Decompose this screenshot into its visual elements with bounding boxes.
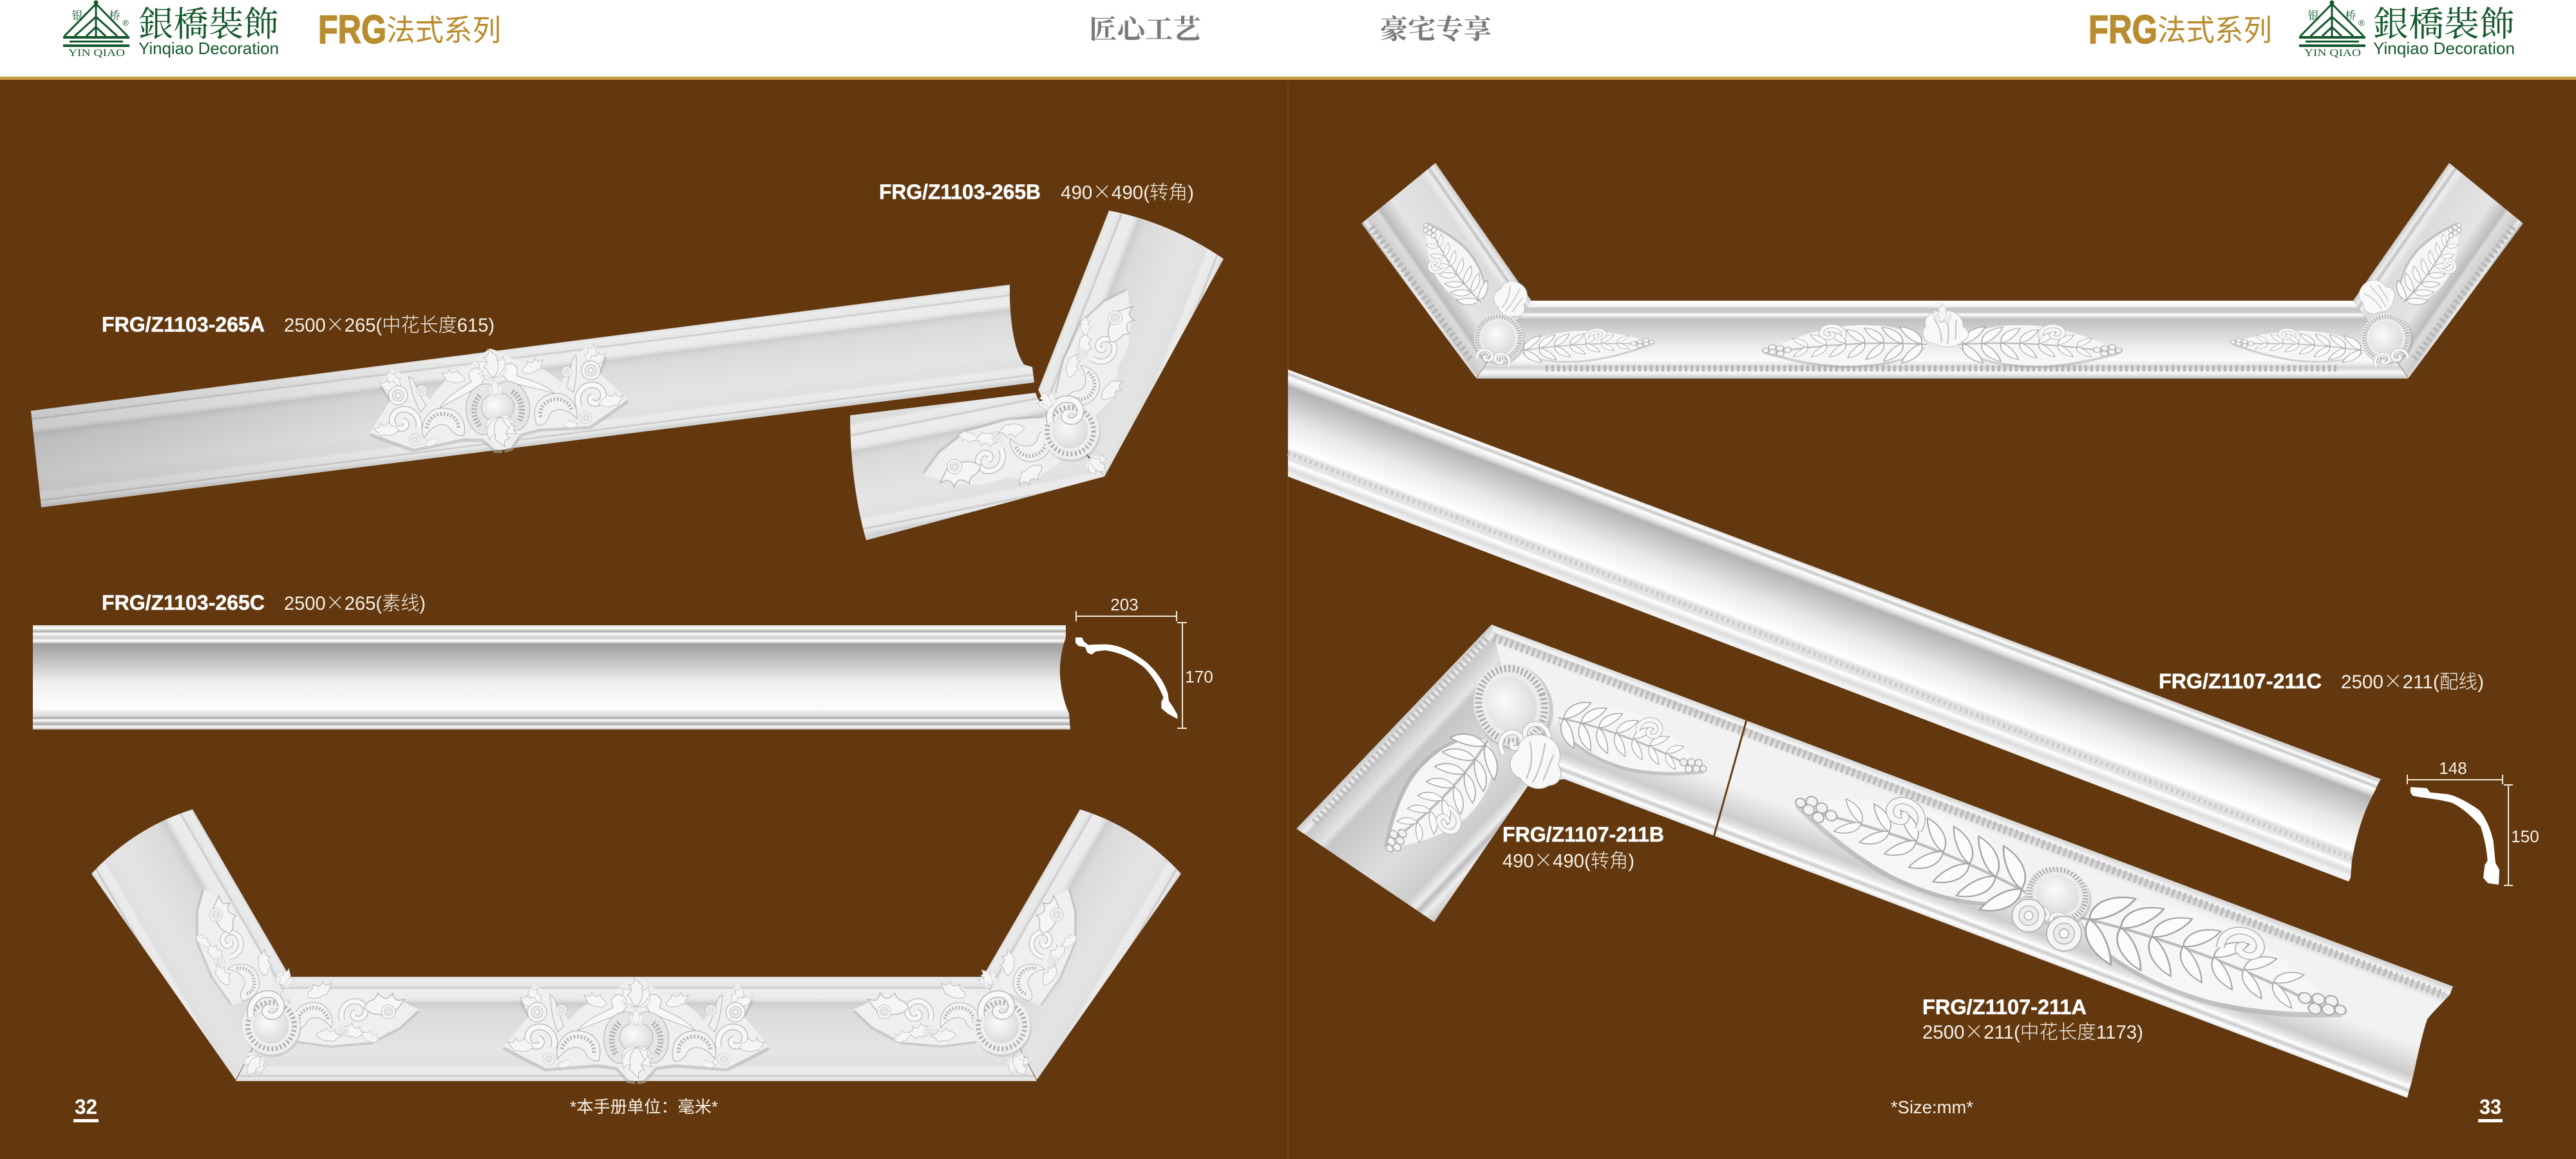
moulding: FRG/Z1107-211C plain diagonal <box>1288 370 2381 881</box>
label: FRG/Z1107-211C: 2500×211(配线) <box>2341 666 2484 694</box>
label: FRG/Z1107-211A: FRG/Z1107-211A <box>1922 995 2087 1019</box>
moulding: FRG/Z1103-265C plain <box>33 625 1070 730</box>
dimension: 170: 170 <box>1185 667 1213 686</box>
logo: Yinqiao Decoration (left): ® <box>122 18 129 28</box>
logo: Yinqiao Decoration (left): YIN QIAO <box>68 48 125 59</box>
ornament: centre flower 265A <box>360 332 634 470</box>
dimension lines 265 <box>1076 611 1187 728</box>
section profile 211 with dimensions <box>2407 759 2539 885</box>
bead row 211C <box>1288 453 2354 859</box>
ornament: centre 211 U view <box>1761 303 2123 373</box>
logo: Yinqiao Decoration (right): 銀橋裝飾 <box>2373 5 2515 44</box>
label: FRG/Z1107-211B: FRG/Z1107-211B <box>1502 823 1664 846</box>
ornament: right corner 265 U view <box>853 873 1101 1083</box>
label: FRG/Z1103-265C: 2500×265(素线) <box>284 587 426 616</box>
series title (left): 法式系列 <box>386 14 501 47</box>
seam line between 211B and 211A <box>1714 720 1747 837</box>
dimension: 203: 203 <box>1110 595 1139 614</box>
label: FRG/Z1107-211B <box>1502 823 1664 873</box>
moulding: FRG/Z1103-265A straight with centre flower <box>31 285 1034 507</box>
label: FRG/Z1107-211B: 490×490(转角) <box>1502 845 1634 873</box>
moulding: 265 assembled U view <box>91 809 1181 1084</box>
header bar <box>0 0 2576 80</box>
series title (right): 法式系列 <box>2157 14 2272 47</box>
label: FRG/Z1103-265B <box>879 176 1194 205</box>
section profile 265 with dimensions <box>1075 595 1213 728</box>
dimension lines 211 <box>2407 775 2513 885</box>
series title (right) <box>2088 8 2272 52</box>
moulding: FRG/Z1107 assembled U view <box>1361 163 2523 379</box>
logo: Yinqiao Decoration (right): Yinqiao Decoration <box>2373 39 2515 58</box>
label: FRG/Z1103-265C <box>102 587 426 616</box>
logo: Yinqiao Decoration (right): YIN QIAO <box>2304 48 2361 59</box>
ornament: corner medallion 265B <box>915 276 1159 509</box>
ornament: centre 211A <box>1781 764 2360 1052</box>
page number 33: 33 <box>2479 1095 2501 1118</box>
label: FRG/Z1103-265B: 490×490(转角) <box>1061 176 1194 205</box>
ornament: left corner 265 U view <box>172 873 420 1084</box>
bead rows 211A/B <box>1314 637 2444 995</box>
footnote: units English: *Size:mm* <box>1891 1097 1973 1117</box>
ornament: centre flower 265 U view <box>502 977 770 1084</box>
label: FRG/Z1103-265B: FRG/Z1103-265B <box>879 180 1041 203</box>
moulding: FRG/Z1103-265B corner piece <box>850 211 1224 540</box>
logo: Yinqiao Decoration (right): 桥 <box>2345 10 2356 22</box>
profile shape 265 <box>1075 637 1177 719</box>
ornament: left corner 211 U view <box>1407 211 1655 371</box>
series title (left) <box>318 8 501 52</box>
header slogan: 匠心工艺: 匠心工艺 <box>1089 15 1201 45</box>
footnote: units Chinese: *本手册单位：毫米* <box>570 1097 718 1117</box>
logo: Yinqiao Decoration (left): Yinqiao Decoration <box>138 39 279 58</box>
ornament: right corner 211 U view <box>2230 211 2477 370</box>
profile shape 211 <box>2410 787 2499 885</box>
logo: Yinqiao Decoration (right) <box>2299 0 2515 59</box>
logo: Yinqiao Decoration (right): 银 <box>2308 10 2318 22</box>
logo: Yinqiao Decoration (left): 桥 <box>109 10 120 22</box>
label: FRG/Z1107-211A <box>1922 995 2143 1044</box>
label: FRG/Z1103-265A: FRG/Z1103-265A <box>102 313 265 336</box>
moulding: FRG/Z1107-211A and 211B corner <box>1296 625 2453 1098</box>
label: FRG/Z1107-211C: FRG/Z1107-211C <box>2159 670 2322 693</box>
series title (right): FRG <box>2088 8 2157 52</box>
bead rows 211 U view <box>1372 227 2513 368</box>
dimension: 148: 148 <box>2439 759 2467 778</box>
logo: Yinqiao Decoration (right): ® <box>2358 18 2365 28</box>
label: FRG/Z1107-211C <box>2159 666 2484 694</box>
ornament: corner medallion 211B <box>1361 652 1716 874</box>
dimension: 150: 150 <box>2511 827 2539 846</box>
series title (left): FRG <box>318 8 386 52</box>
label: FRG/Z1103-265A <box>102 309 495 337</box>
logo: Yinqiao Decoration (left): 银 <box>72 10 82 22</box>
page number 32: 32 <box>75 1095 97 1118</box>
logo: Yinqiao Decoration (left) <box>63 0 279 59</box>
logo: Yinqiao Decoration (left): 銀橋裝飾 <box>138 5 279 44</box>
header slogan: 豪宅专享: 豪宅专享 <box>1380 15 1492 45</box>
label: FRG/Z1103-265C: FRG/Z1103-265C <box>102 591 265 614</box>
label: FRG/Z1107-211A: 2500×211(中花长度1173) <box>1922 1016 2143 1044</box>
label: FRG/Z1103-265A: 2500×265(中花长度615) <box>284 309 495 337</box>
